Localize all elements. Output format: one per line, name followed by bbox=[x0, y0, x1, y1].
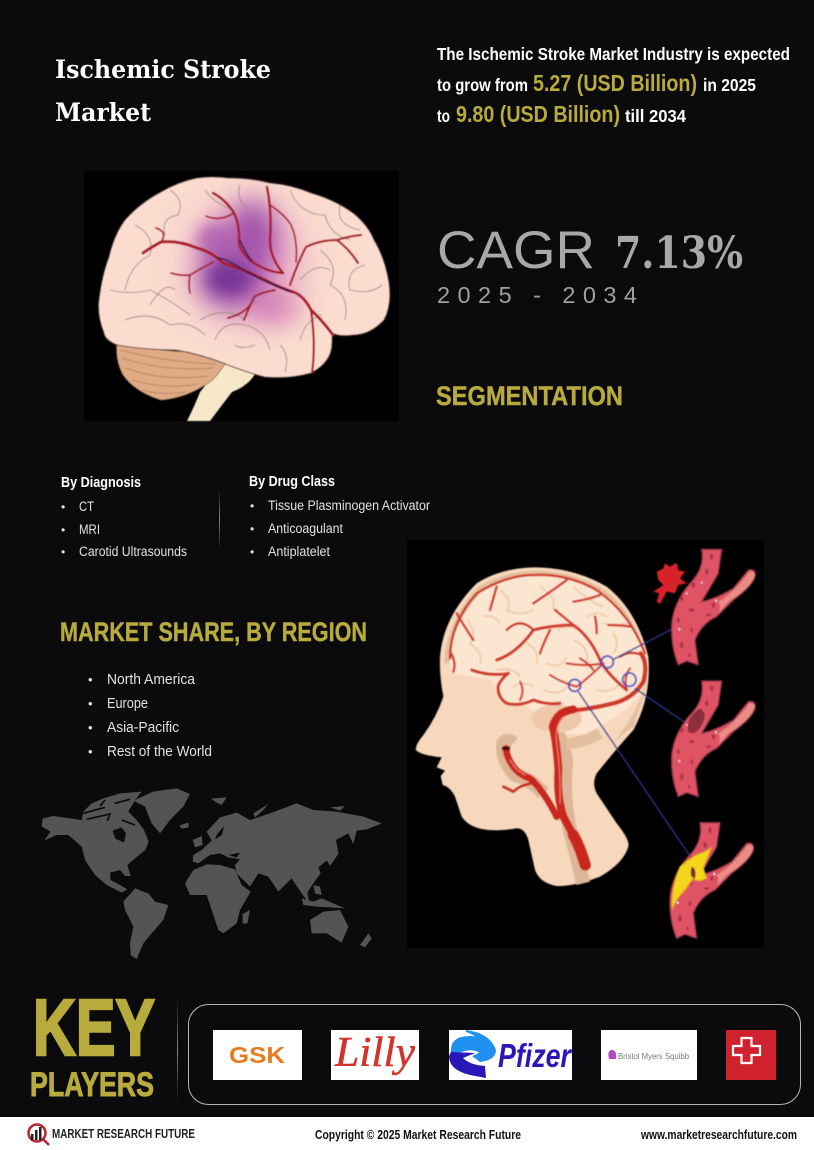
region list: North America bbox=[107, 671, 196, 688]
CAGR: 2025 - 2034 bbox=[437, 282, 637, 308]
cerebellum bbox=[117, 343, 225, 400]
artery detail: plaque bbox=[670, 823, 754, 938]
artery detail: blood clot bbox=[672, 681, 755, 797]
region list: • bbox=[88, 672, 93, 687]
region list: • bbox=[88, 744, 93, 759]
heading: market share by region: MARKET SHARE, BY REGION bbox=[60, 617, 367, 647]
CAGR: 7.13% bbox=[615, 228, 743, 279]
region list: • bbox=[88, 696, 93, 711]
market forecast text bbox=[437, 44, 790, 127]
CAGR: CAGR bbox=[437, 221, 595, 280]
segment list: by drug class: • bbox=[250, 522, 254, 536]
illustration: brain with stroke bbox=[84, 171, 399, 421]
segment list: by drug class: Antiplatelet bbox=[268, 544, 330, 559]
market forecast text: to grow from bbox=[437, 75, 528, 95]
segment list: by diagnosis: Carotid Ultrasounds bbox=[79, 544, 187, 559]
logo: red cross bbox=[726, 1030, 776, 1080]
segment list: by diagnosis: CT bbox=[79, 499, 94, 514]
market forecast text: 5.27 (USD Billion) bbox=[533, 70, 697, 96]
artery detail: hemorrhage bbox=[653, 549, 755, 665]
title: Ischemic Stroke bbox=[55, 55, 271, 85]
world map bbox=[42, 788, 382, 959]
neck artery shading bbox=[503, 733, 583, 883]
head silhouette bbox=[416, 567, 649, 886]
key players heading: PLAYERS bbox=[30, 1066, 154, 1104]
key players heading: KEY bbox=[33, 983, 155, 1072]
segment list: by drug class: Anticoagulant bbox=[268, 521, 343, 536]
brain folds bbox=[467, 587, 627, 693]
market forecast text: in 2025 bbox=[703, 75, 756, 95]
footer logo bbox=[28, 1124, 49, 1145]
segment list: by drug class: By Drug Class bbox=[249, 474, 335, 490]
illustration: head with cerebral arteries bbox=[407, 540, 764, 948]
logo: GSK bbox=[213, 1030, 302, 1080]
region list: Asia-Pacific bbox=[107, 719, 179, 736]
brain area bbox=[449, 574, 646, 734]
pointer lines and circles bbox=[569, 629, 689, 855]
region list: Europe bbox=[107, 695, 148, 712]
segment list: by diagnosis: • bbox=[61, 523, 65, 537]
market forecast text: till 2034 bbox=[625, 106, 686, 126]
segment list: by drug class bbox=[249, 474, 430, 559]
market forecast text: to bbox=[437, 106, 450, 126]
key players panel bbox=[188, 1004, 800, 1104]
arteries bbox=[450, 575, 645, 712]
arteries bbox=[143, 187, 361, 373]
brain folds bbox=[110, 185, 382, 372]
logo: Bristol Myers Squibb: Bristol Myers Squibb bbox=[618, 1052, 690, 1061]
ischemic area glow bbox=[193, 201, 299, 322]
CAGR bbox=[437, 221, 743, 308]
carotid artery bbox=[503, 709, 585, 865]
skull rim shading bbox=[444, 571, 647, 743]
segment list: by diagnosis: • bbox=[61, 545, 65, 559]
logo: Bristol Myers Squibb bbox=[601, 1030, 697, 1080]
title: Market bbox=[55, 98, 151, 128]
region list: Rest of the World bbox=[107, 743, 212, 760]
logo: Pfizer bbox=[449, 1030, 573, 1080]
key players heading bbox=[30, 983, 155, 1104]
market forecast text: 9.80 (USD Billion) bbox=[456, 101, 620, 127]
cerebrum bbox=[99, 177, 390, 378]
segment list: by drug class: Tissue Plasminogen Activator bbox=[268, 498, 430, 513]
brain stem bbox=[187, 358, 256, 421]
logo: Lilly: Lilly bbox=[334, 1030, 415, 1076]
segment list: by drug class: • bbox=[250, 499, 254, 513]
footer bbox=[0, 1117, 814, 1150]
heading: segmentation: SEGMENTATION bbox=[436, 381, 623, 411]
logo: Pfizer: Pfizer bbox=[498, 1037, 573, 1074]
footer: Copyright © 2025 Market Research Future bbox=[315, 1128, 521, 1142]
segment list: by diagnosis bbox=[61, 475, 187, 559]
region list: • bbox=[88, 720, 93, 735]
segment list: by diagnosis: MRI bbox=[79, 522, 100, 537]
footer: MARKET RESEARCH FUTURE bbox=[52, 1127, 195, 1141]
logo: GSK: GSK bbox=[229, 1042, 285, 1068]
segment list: by diagnosis: By Diagnosis bbox=[61, 475, 141, 491]
title bbox=[55, 55, 271, 128]
segment list: by diagnosis: • bbox=[61, 500, 65, 514]
region list bbox=[88, 671, 212, 760]
segment list: by drug class: • bbox=[250, 545, 254, 559]
